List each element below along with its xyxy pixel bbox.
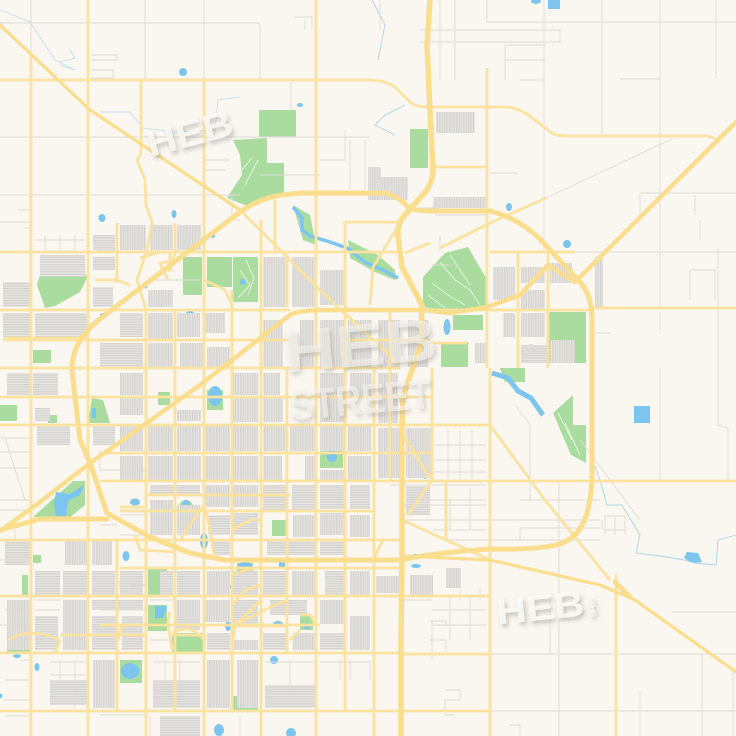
- residential blocks, vertical streets: [7, 112, 603, 708]
- park paths: [238, 158, 580, 455]
- watermark: HEB STREET centre: HEB: [280, 305, 440, 386]
- watermark: HEB STREET centre: STREET: [288, 370, 433, 429]
- watermark: HEB bottom: HEB: [494, 582, 586, 632]
- watermark: HEB STREET centre: [280, 305, 440, 429]
- river: [0, 0, 736, 565]
- parks: [0, 110, 586, 710]
- residential blocks, horizontal streets: [3, 235, 549, 736]
- watermark: HEB bottom: STREET: [587, 595, 598, 618]
- watermark: HEB top: HEB: [142, 102, 237, 165]
